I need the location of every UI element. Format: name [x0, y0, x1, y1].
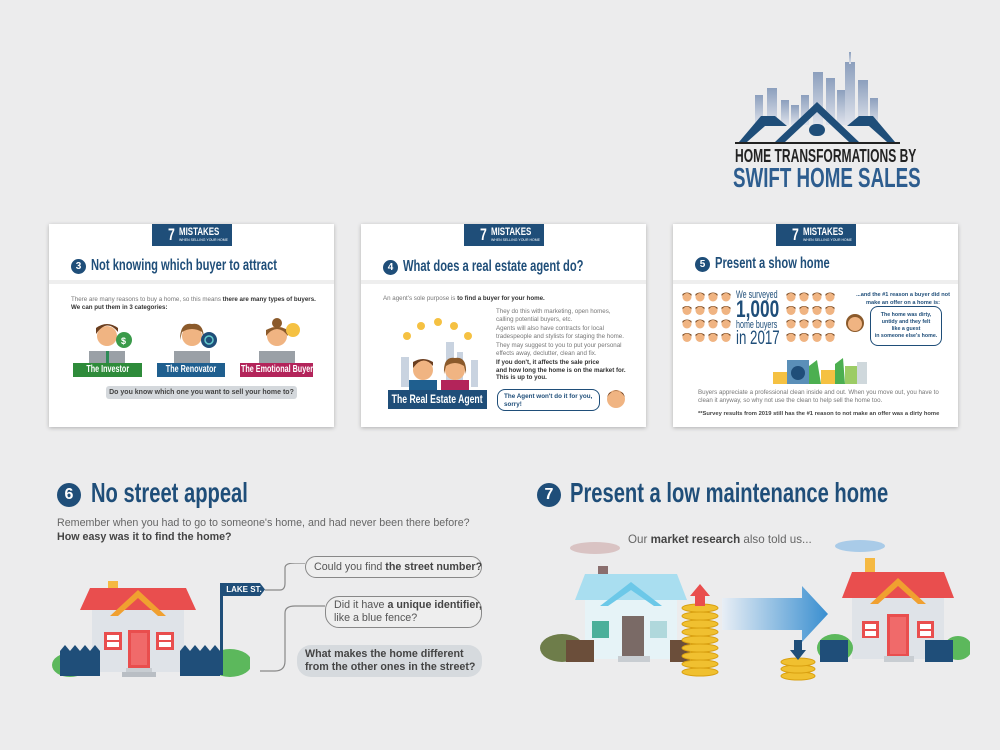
bubble: street number [305, 556, 482, 578]
icon: sad man [607, 390, 625, 408]
banner: MISTAKES [491, 226, 531, 238]
buyer figures: $ [121, 336, 126, 346]
intro text [57, 517, 470, 543]
agent duties text: If you don't, it affects the sale price [496, 359, 599, 366]
agent duties text: calling potential buyers, etc. [496, 316, 572, 322]
bubble: unique identifier [325, 596, 482, 628]
section 7: low maintenance: 7 [545, 486, 553, 503]
panel: card 4 agent [361, 224, 646, 427]
heading [71, 257, 277, 274]
agent duties text: effects away, declutter, clean and fix. [496, 350, 597, 356]
survey stat [736, 289, 780, 349]
bubble: street number: Could you find the street number? [314, 561, 482, 573]
house illustration [52, 581, 250, 677]
quote bubble: untidy and they felt [882, 319, 930, 325]
ribbon: agent: The Real Estate Agent [392, 392, 483, 406]
intro text: How easy was it to find the home? [57, 531, 232, 543]
connector lines [260, 563, 325, 672]
survey stat: in 2017 [736, 328, 780, 349]
ribbon: agent [388, 390, 487, 409]
survey stat: We surveyed [736, 289, 778, 301]
cleaning supplies [773, 358, 867, 384]
banner [464, 224, 544, 246]
speech bubble [497, 389, 600, 411]
logo [733, 52, 921, 193]
quote bubble: The home was dirty, [881, 312, 931, 318]
sign: lake st: LAKE ST. [226, 585, 262, 594]
speech bubble: The Agent won't do it for you, sorry! [504, 393, 592, 408]
agent duties text [496, 308, 626, 381]
banner: 7 [168, 225, 175, 244]
banner: MISTAKES [179, 226, 219, 238]
ribbon: renovator [157, 363, 225, 377]
banner: 7 [480, 225, 487, 244]
banner: MISTAKES [803, 226, 843, 238]
section 6: street appeal: No street appeal [91, 477, 248, 508]
intro text [71, 296, 316, 311]
reason text: ...and the #1 reason a buyer did not make an offer on a home is: [856, 292, 950, 306]
panel: card 5 show home: Present a show home [715, 255, 830, 272]
agent duties text: tradespeople and stylists for staging the home. [496, 332, 624, 340]
survey stat: 1,000 [736, 296, 779, 323]
panel: card 3 buyer types: 3 [76, 261, 81, 272]
ribbon: investor: The Investor [86, 364, 129, 375]
intro text: An agent's sole purpose is to find a buyer for your home. [383, 295, 545, 302]
heading [383, 258, 583, 275]
ribbon: investor [73, 363, 142, 377]
question box: Do you know which one you want to sell your home to? [109, 389, 294, 396]
heading [57, 477, 248, 508]
banner [152, 224, 232, 246]
intro text: We can put them in 3 categories: [71, 304, 168, 311]
panel: card 3 buyer types: Not knowing which buyer to attract [91, 257, 277, 274]
panel: card 5 show home: 5 [700, 259, 705, 270]
logo: SWIFT HOME SALES [733, 162, 921, 193]
buyer figures [89, 318, 300, 363]
intro text: Remember when you had to go to someone's home, and had never been there before? [57, 517, 470, 529]
banner: 7 [792, 225, 799, 244]
section 7: low maintenance: Present a low maintenance home [570, 477, 888, 508]
banner: WHEN SELLING YOUR HOME [179, 238, 228, 242]
heading [537, 477, 888, 508]
body text: Buyers appreciate a professional clean inside and out. When you move out, you have to clean it anyway, so why not use the clean to help sell the home too. [698, 389, 939, 404]
bubble: unique identifier: like a blue fence? [334, 612, 417, 624]
bubble: what makes different: What makes the home different [305, 648, 464, 660]
section 6: street appeal [52, 477, 482, 677]
intro text: There are many reasons to buy a home, so this means there are many types of buyers. [71, 296, 316, 303]
ribbon: emotional buyer: The Emotional Buyer [241, 364, 313, 375]
bubble: what makes different: from the other ones in the street? [305, 661, 475, 673]
agent duties text: This is up to you. [496, 374, 547, 381]
banner: WHEN SELLING YOUR HOME [491, 238, 540, 242]
quote bubble [870, 306, 942, 346]
agent duties text: and how long the home is on the market for. [496, 366, 626, 374]
quote bubble: in someone else's home. [875, 333, 937, 339]
panel: card 4 agent: What does a real estate agent do? [403, 258, 583, 275]
heading [695, 255, 830, 272]
agent duties text: Agents will also have contracts for local [496, 325, 604, 332]
faces grid [682, 292, 834, 342]
bubble: what makes different [297, 645, 482, 677]
banner: WHEN SELLING YOUR HOME [803, 238, 852, 242]
banner [776, 224, 856, 246]
question box [106, 386, 297, 399]
illustration: before/after [540, 540, 970, 680]
panel: card 5 show home [673, 224, 958, 427]
panel: card 3 buyer types [49, 224, 334, 427]
panel: card 4 agent: 4 [388, 262, 393, 273]
agent duties text: They may suggest to you to put your personal [496, 342, 622, 349]
bubble: unique identifier: Did it have a unique identifier, [334, 599, 482, 611]
footnote: **Survey results from 2019 still has the #1 reason to not make an offer was a dirty home [698, 411, 939, 417]
logo: HOME TRANSFORMATIONS BY [735, 146, 916, 166]
survey stat: home buyers [736, 319, 777, 331]
section 7: low maintenance [537, 477, 970, 680]
agent illustration [401, 318, 478, 390]
agent duties text: They do this with marketing, open homes, [496, 308, 611, 315]
section 6: street appeal: 6 [65, 486, 73, 503]
quote bubble: like a guest [892, 326, 920, 332]
sign: lake st [223, 583, 265, 596]
ribbon: renovator: The Renovator [166, 364, 216, 375]
icon: woman face [846, 314, 864, 332]
intro text: Our market research also told us... [628, 533, 812, 546]
